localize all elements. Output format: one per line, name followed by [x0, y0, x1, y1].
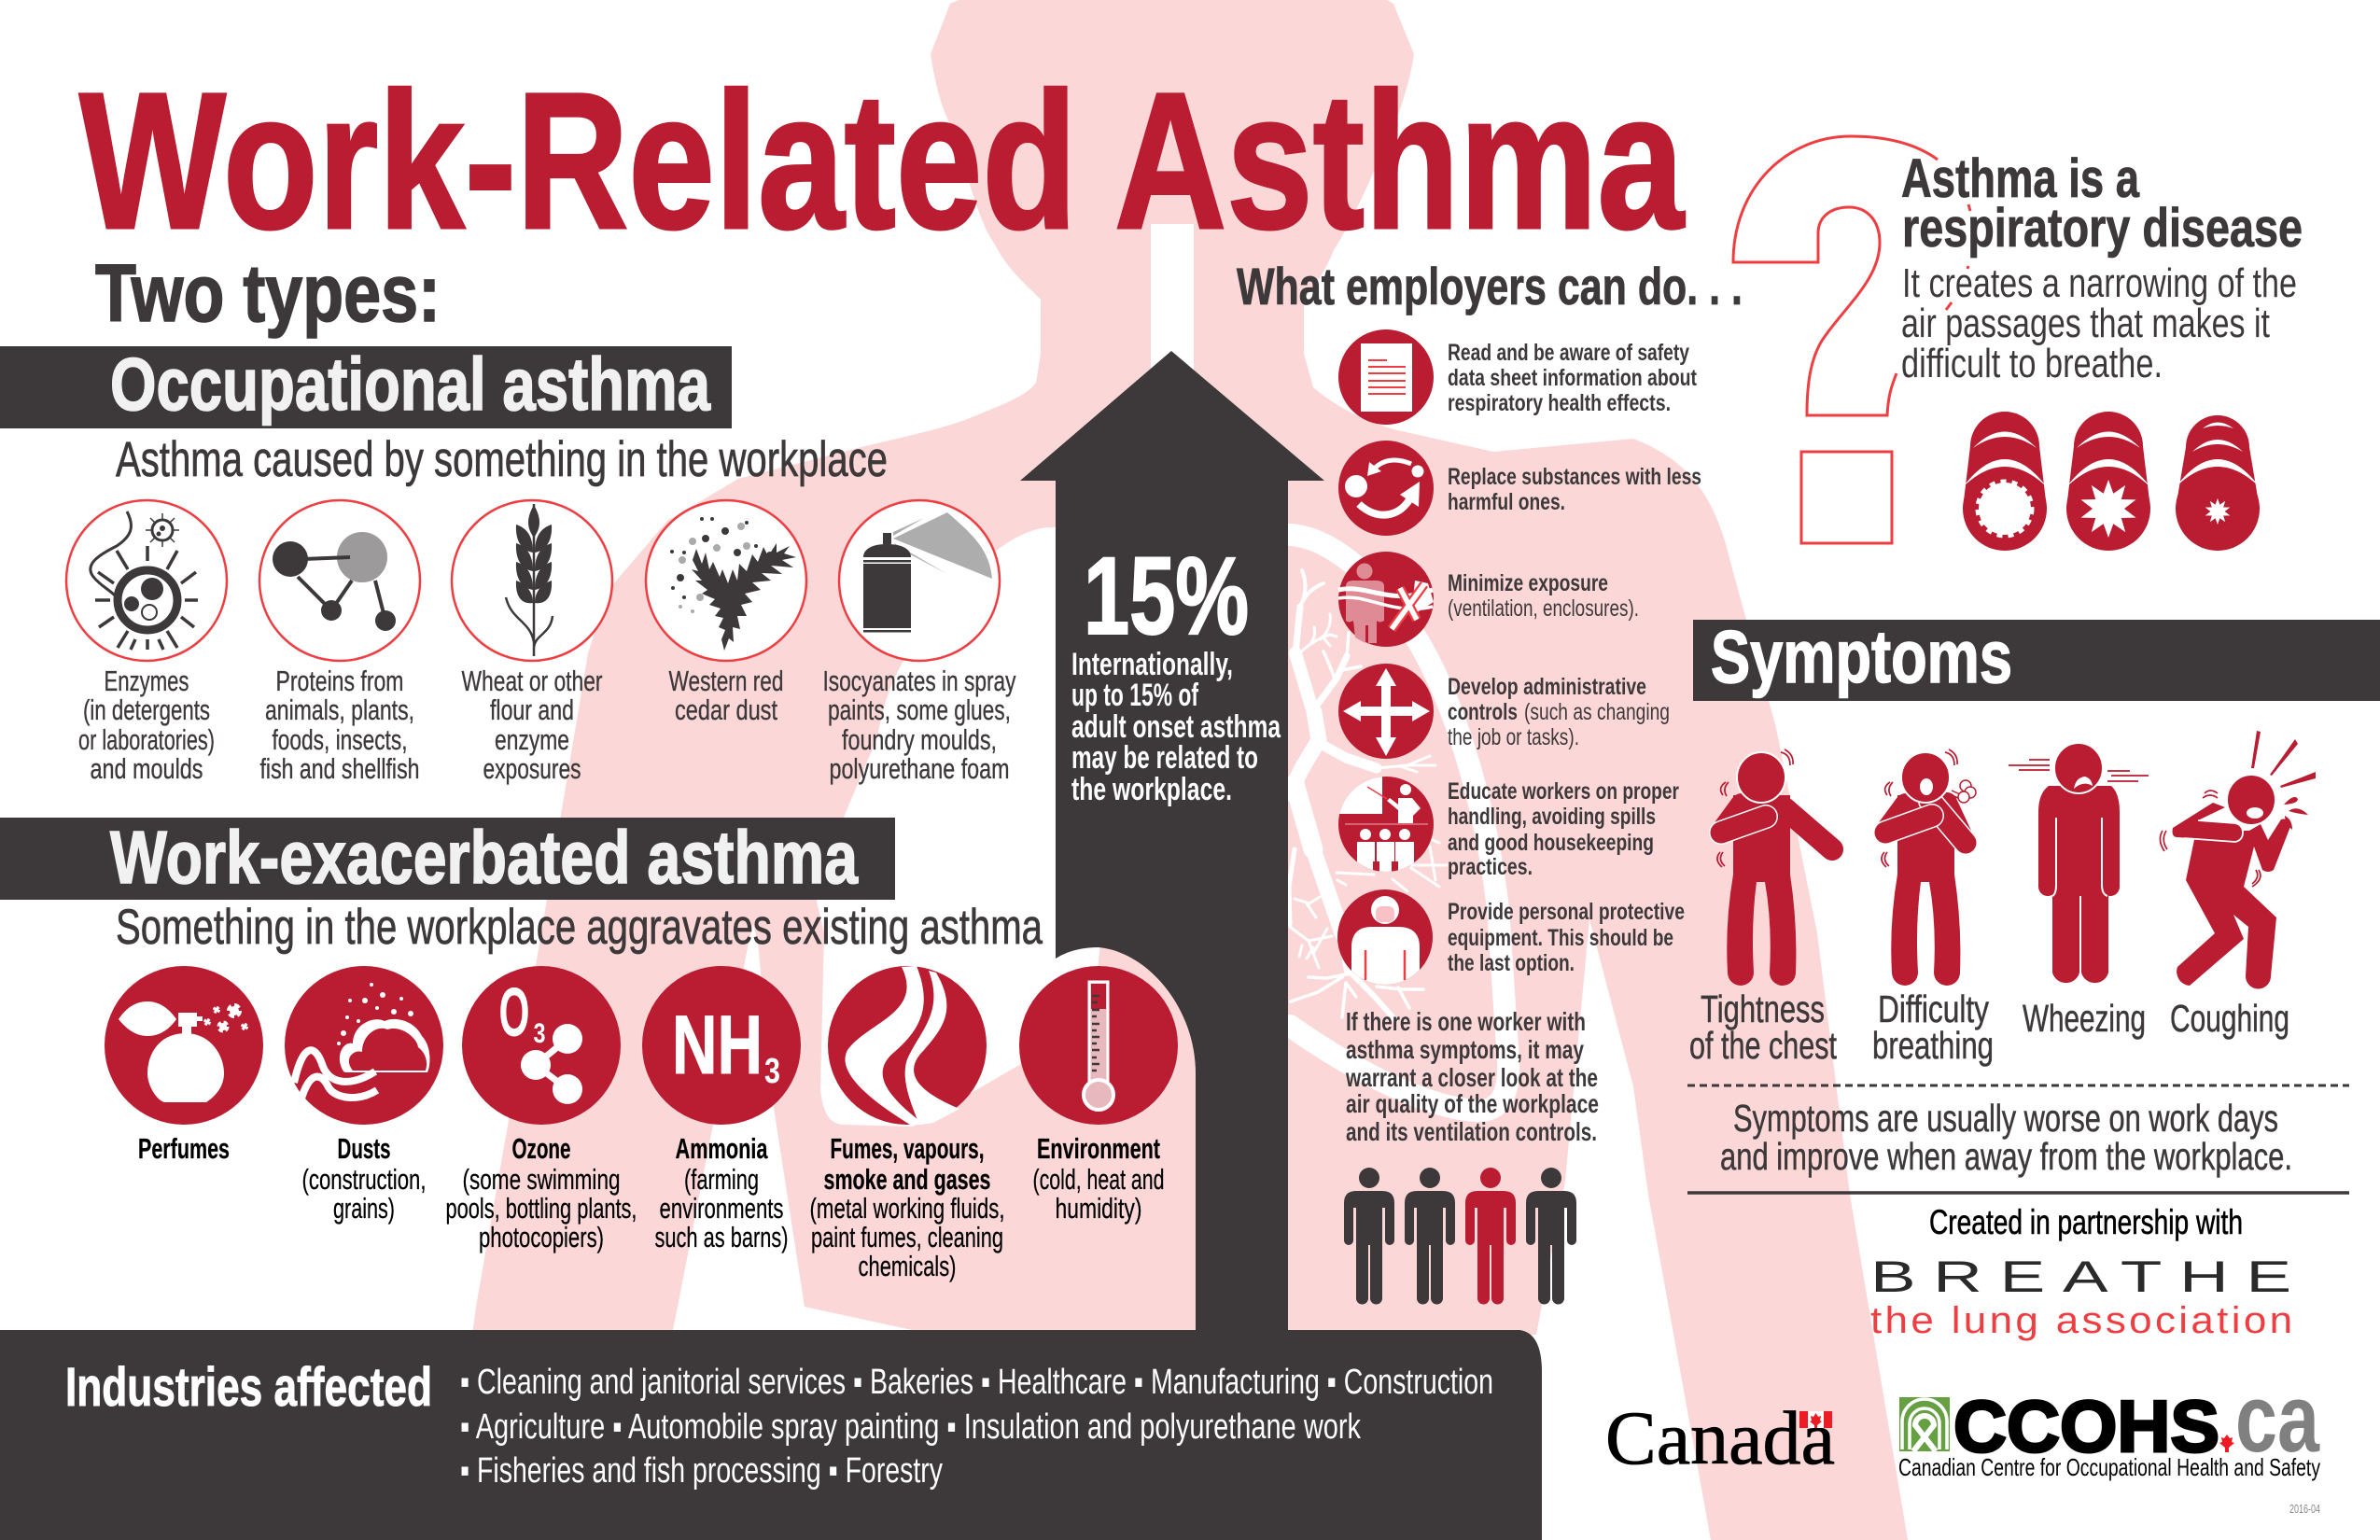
panel: industries affected: ▪ Cleaning and janitorial services ▪ Bakeries ▪ Healthcare ▪ Manufacturing ▪ Construction	[460, 1363, 1493, 1402]
text: educate workers: Educate workers on proper	[1448, 778, 1679, 805]
text: occupational cause labels: fish and shellfish	[259, 752, 420, 785]
text: educate workers: handling, avoiding spills	[1448, 804, 1656, 830]
panel: industries affected: ▪ Agriculture ▪ Automobile spray painting ▪ Insulation and polyurethane work	[460, 1407, 1362, 1447]
title: Work-Related Asthma	[79, 53, 1685, 270]
text: exacerbating cause labels: Environment	[1037, 1132, 1160, 1165]
text: exacerbating cause labels: Dusts	[338, 1132, 390, 1165]
text: one worker note: asthma symptoms, it may	[1346, 1035, 1584, 1064]
text: occupational cause labels: foods, insects,	[273, 723, 407, 756]
background body silhouette	[472, 0, 1908, 1540]
icon: fumes	[828, 966, 987, 1125]
text: occupational cause labels: paints, some glues,	[828, 693, 1011, 726]
icon: difficulty breathing	[1882, 749, 1976, 986]
text: exacerbating cause labels: Perfumes	[138, 1132, 230, 1165]
text: safety data sheets: data sheet information about	[1448, 365, 1698, 391]
statistic: 15%: Internationally,	[1071, 647, 1233, 682]
text: symptom labels	[1689, 987, 2289, 1067]
statistic: 15%: adult onset asthma	[1071, 709, 1281, 745]
text: exacerbated description: Something in the workplace aggravates existing asthma	[116, 900, 1043, 955]
text: symptom labels: Coughing	[2170, 997, 2289, 1040]
panel: symptoms heading	[1693, 615, 2380, 701]
text: occupational cause labels: exposures	[483, 752, 581, 785]
statistic: 15%: 15%	[1084, 535, 1249, 658]
text: symptom labels: of the chest	[1689, 1024, 1837, 1067]
text: protective equipment: the last option.	[1448, 950, 1575, 976]
text: protective equipment: equipment. This should be	[1448, 925, 1673, 951]
panel: occupational asthma heading: Occupational asthma	[110, 343, 710, 426]
text: administrative controls: the job or tasks).	[1448, 724, 1579, 750]
text: occupational cause labels: and moulds	[90, 752, 203, 785]
text: exacerbating cause labels	[138, 1132, 1165, 1282]
logo: breathe the lung association	[1870, 1253, 2292, 1341]
text: exacerbating cause labels: smoke and gases	[823, 1163, 991, 1196]
icon: ozone	[462, 966, 621, 1125]
heading: what employers can do: What employers can do. . .	[1237, 257, 1743, 315]
icon: safety data sheet	[1338, 329, 1434, 425]
text: one worker note: and its ventilation controls.	[1346, 1117, 1597, 1146]
panel: industries affected: ▪ Fisheries and fish processing ▪ Forestry	[460, 1451, 943, 1491]
panel: industries affected	[0, 1330, 1542, 1540]
text: one worker note: If there is one worker with	[1346, 1007, 1586, 1036]
text: exacerbating cause labels: (farming	[684, 1163, 759, 1196]
text: exacerbating cause labels: (some swimming	[463, 1163, 620, 1196]
text: administrative controls	[1448, 674, 1670, 750]
text: one worker note: air quality of the workplace	[1346, 1089, 1599, 1118]
text: occupational description: Asthma caused by something in the workplace	[116, 432, 888, 487]
text: occupational cause labels: foundry moulds,	[842, 723, 997, 756]
statistic: 15%	[1071, 535, 1281, 807]
text: symptoms note	[1720, 1097, 2292, 1178]
text: symptom labels: Wheezing	[2023, 997, 2146, 1040]
text: exacerbating cause labels: (metal working fluids,	[810, 1192, 1004, 1225]
text: protective equipment	[1448, 899, 1685, 976]
text: exacerbating cause labels: photocopiers)	[479, 1221, 604, 1253]
text: exacerbating cause labels: (construction,	[302, 1163, 426, 1196]
icon: narrowing airways	[1963, 412, 2260, 551]
text: asthma is a respiratory disease: air passages that makes it	[1901, 301, 2270, 346]
icon: ammonia: 3	[764, 1052, 780, 1091]
icon: proteins	[259, 500, 420, 661]
text: minimize exposure: (ventilation, enclosures).	[1448, 595, 1639, 622]
text: exacerbating cause labels: environments	[659, 1192, 784, 1225]
text: occupational cause labels: flour and	[490, 693, 574, 726]
statistic: 15%: may be related to	[1071, 740, 1258, 776]
logo: canada wordmark: Canada	[1605, 1395, 1835, 1480]
text: safety data sheets: respiratory health effects.	[1448, 390, 1671, 416]
lung outline and bronchial tree	[1289, 535, 1508, 1111]
icon: protective equipment	[1337, 889, 1433, 989]
icon: four workers, one highlighted	[1344, 1168, 1576, 1305]
icon: ammonia	[642, 966, 801, 1125]
text: symptom labels: Tightness	[1701, 987, 1825, 1030]
text: asthma is a respiratory disease	[1901, 148, 2303, 386]
text: occupational cause labels: enzyme	[495, 723, 569, 756]
text: safety data sheets: Read and be aware of safety	[1448, 340, 1689, 366]
panel: industries affected: Industries affected	[65, 1357, 432, 1418]
icon: wheezing	[2009, 743, 2149, 983]
panel: occupational asthma heading	[0, 343, 732, 428]
icon: ammonia: NH	[672, 998, 763, 1091]
icon: tightness of the chest	[1717, 749, 1832, 986]
panel: work-exacerbated asthma heading: Work-exacerbated asthma	[110, 816, 858, 899]
text: exacerbating cause labels: Ozone	[511, 1132, 571, 1165]
text: occupational cause labels: or laboratories)	[78, 723, 215, 756]
logo: breathe the lung association: the lung association	[1870, 1299, 2292, 1341]
logo: ccohs: ca	[2235, 1365, 2320, 1472]
icon: minimize exposure	[1338, 552, 1434, 647]
icon: dusts	[285, 966, 443, 1125]
icon: spray can	[839, 500, 1000, 661]
text: occupational cause labels: Enzymes	[105, 665, 189, 697]
statistic: 15%: the workplace.	[1071, 772, 1232, 807]
text: asthma is a respiratory disease: Asthma is a	[1901, 148, 2140, 209]
text: exacerbating cause labels: pools, bottling plants,	[446, 1192, 637, 1225]
text: minimize exposure	[1448, 570, 1639, 622]
text: exacerbating cause labels: such as barns)	[655, 1221, 788, 1253]
text: protective equipment: Provide personal protective	[1448, 899, 1685, 925]
icon: administrative controls	[1338, 664, 1434, 759]
text: occupational cause labels: (in detergents	[83, 693, 210, 726]
icon: replace substances	[1338, 441, 1434, 536]
text: occupational cause labels: Wheat or other	[461, 665, 603, 697]
icon: wheat	[452, 500, 612, 661]
text: replace substances: harmful ones.	[1448, 489, 1565, 515]
text: occupational cause labels: animals, plants,	[265, 693, 414, 726]
icon: ozone: 3	[534, 1018, 545, 1049]
central arrow	[1020, 351, 1324, 1335]
logo: ccohs: CCOHS	[1953, 1385, 2219, 1467]
white gaps in the silhouette	[817, 224, 1194, 1127]
text: administrative controls: Develop administrative	[1448, 674, 1646, 700]
text: occupational cause labels	[78, 665, 1016, 785]
icon: thermometer	[1019, 966, 1178, 1125]
panel: symptoms heading: Symptoms	[1711, 615, 2012, 698]
icon: cedar dust	[646, 500, 806, 661]
icon: perfume	[105, 966, 263, 1125]
text: occupational cause labels: Proteins from	[276, 665, 403, 697]
text: safety data sheets	[1448, 340, 1698, 416]
text: exacerbating cause labels: (cold, heat and	[1032, 1163, 1165, 1196]
question mark outline	[1733, 136, 1970, 543]
text: replace substances	[1448, 464, 1701, 515]
text: administrative controls: controls	[1448, 699, 1518, 725]
text: exacerbating cause labels: Fumes, vapours,	[831, 1132, 984, 1165]
text: partnership: Created in partnership with	[1929, 1203, 2243, 1241]
text: symptom labels: breathing	[1872, 1024, 1994, 1067]
heading: two types: Two types:	[95, 248, 441, 339]
icon: educate workers	[1338, 777, 1434, 872]
text: one worker note	[1345, 1007, 1599, 1146]
statistic: 15%: up to 15% of	[1071, 678, 1198, 713]
icon: coughing	[2160, 731, 2316, 989]
text: occupational cause labels: polyurethane foam	[829, 752, 1010, 785]
text: educate workers: practices.	[1448, 854, 1533, 880]
text: exacerbating cause labels: chemicals)	[859, 1250, 956, 1282]
icon: ozone: O	[498, 973, 530, 1051]
text: exacerbating cause labels: Ammonia	[676, 1132, 768, 1165]
text: symptom labels: Difficulty	[1878, 987, 1989, 1030]
text: educate workers: and good housekeeping	[1448, 830, 1654, 856]
text: asthma is a respiratory disease: difficult to breathe.	[1901, 341, 2163, 386]
text: replace substances: Replace substances with less	[1448, 464, 1701, 490]
text: one worker note: warrant a closer look at the	[1345, 1063, 1598, 1092]
text: occupational cause labels: cedar dust	[675, 693, 777, 726]
text: educate workers	[1448, 778, 1679, 880]
logo: breathe the lung association: BREATHE	[1870, 1253, 2291, 1301]
text: minimize exposure: Minimize exposure	[1448, 570, 1608, 596]
text: date code: 2016-04	[2289, 1502, 2320, 1516]
text: administrative controls: (such as changing	[1524, 699, 1670, 725]
text: exacerbating cause labels: grains)	[333, 1192, 395, 1225]
logo: ccohs	[1898, 1365, 2320, 1481]
text: exacerbating cause labels: humidity)	[1055, 1192, 1142, 1225]
icon: enzymes	[66, 500, 227, 661]
text: occupational cause labels: Western red	[668, 665, 784, 697]
text: exacerbating cause labels: paint fumes, cleaning	[811, 1221, 1003, 1253]
text: occupational cause labels: Isocyanates in spray	[823, 665, 1016, 697]
